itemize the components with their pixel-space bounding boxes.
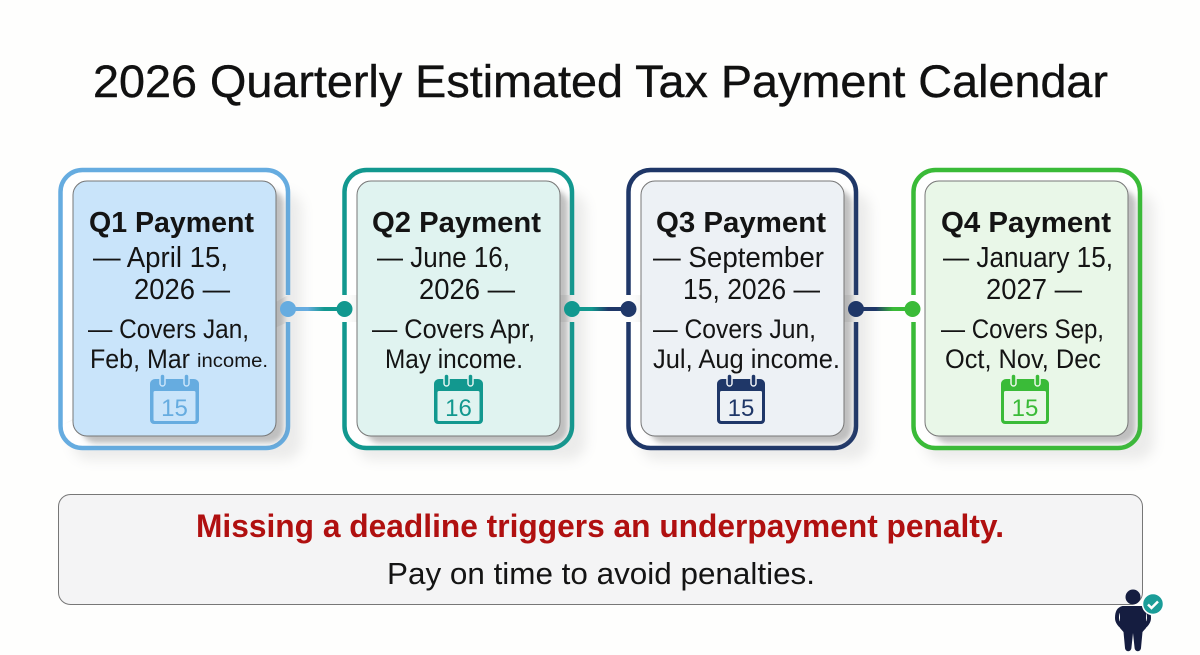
icon: calendar 15: 15 [161,395,188,422]
deadline: — January 15, [943,242,1113,274]
title: 2026 Quarterly Estimated Tax Payment Calendar [93,56,1108,107]
coverage: income. [197,351,268,372]
deadline: 15, 2026 — [683,274,820,306]
icon: calendar 15 [1001,374,1049,424]
icon: calendar 15: 15 [728,395,754,422]
icon: calendar 16 [434,374,483,424]
deadline [653,242,824,306]
deadline: 2026 — [419,274,515,306]
coverage: — Covers Jun, [653,314,816,344]
deadline [943,242,1113,306]
callout: penalty warning [58,494,1142,604]
icon: calendar 15 [150,374,199,424]
warning headline: Missing a deadline triggers an underpayment penalty. [196,508,1004,544]
panel: Q3 payment [628,170,870,460]
coverage: — Covers Jan, [88,314,249,344]
coverage: Feb, Mar [90,344,190,374]
coverage: — Covers Apr, [372,314,535,344]
deadline: — April 15, [93,242,228,274]
heading: Q2 Payment [372,207,541,239]
icon: calendar 15: 15 [1012,395,1038,422]
coverage: Oct, Nov, Dec [945,344,1101,374]
coverage: May income. [385,344,523,374]
panel: Q4 payment [914,170,1154,460]
coverage: — Covers Sep, [941,314,1104,344]
heading: Q4 Payment [941,207,1111,239]
connector: Q3 to Q4 [848,301,920,317]
icon: person with check badge [1117,590,1164,651]
icon: calendar 16: 16 [445,395,472,422]
heading: Q1 Payment [89,207,254,239]
coverage [88,314,268,374]
connector: Q1 to Q2 [280,301,352,317]
deadline [377,242,515,306]
deadline: 2026 — [134,274,230,306]
deadline: — September [653,242,824,274]
panel: Q1 payment [60,170,302,460]
advice line: Pay on time to avoid penalties. [387,556,815,591]
deadline: 2027 — [986,274,1082,306]
icon: calendar 15 [717,374,765,424]
heading: Q3 Payment [656,207,826,239]
deadline: — June 16, [377,242,510,274]
connector: Q2 to Q3 [564,301,636,317]
coverage: Jul, Aug income. [653,344,840,374]
coverage [653,314,840,374]
coverage [941,314,1104,374]
deadline [93,242,230,306]
panel: Q2 payment [344,170,586,460]
coverage [372,314,535,374]
